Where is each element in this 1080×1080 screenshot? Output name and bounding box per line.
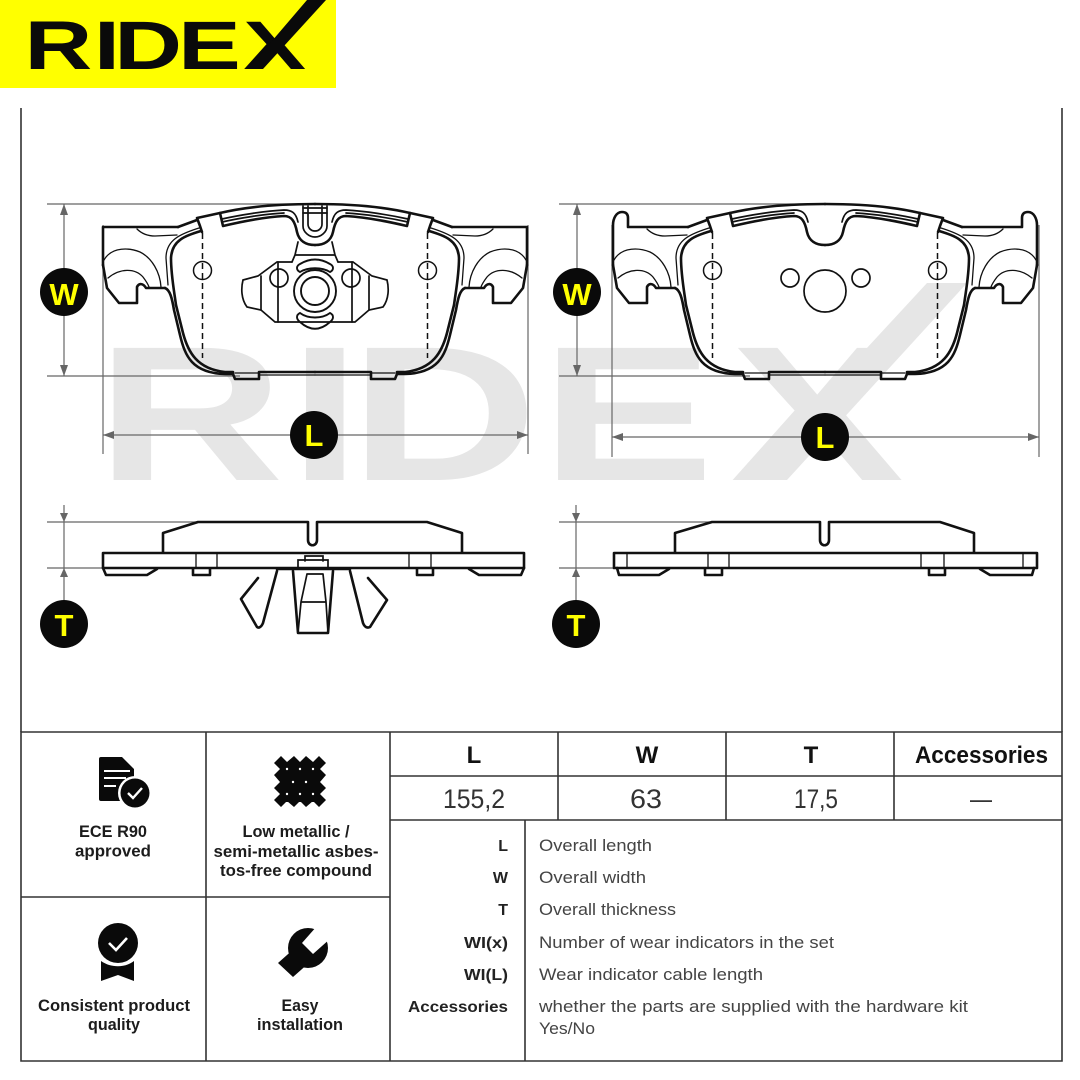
icon: quality badge bbox=[98, 923, 138, 981]
table values: 155,2 bbox=[443, 784, 505, 814]
legend keys: L bbox=[498, 838, 508, 855]
label: installation bbox=[257, 1016, 343, 1034]
top centre clip bbox=[292, 206, 338, 262]
table header: L bbox=[467, 742, 481, 769]
feature grid and table rules bbox=[21, 732, 1062, 1061]
legend keys: W bbox=[493, 870, 509, 887]
watermark: RIDEX letters: RIDEX bbox=[96, 307, 904, 521]
label: ECE R90 bbox=[79, 823, 147, 841]
panel: easy installation bbox=[257, 926, 343, 1034]
brake pad side view: right bbox=[614, 522, 1037, 575]
T badge: left: T bbox=[55, 608, 74, 643]
legend descriptions bbox=[538, 837, 968, 1038]
dimension lines: right front view bbox=[559, 204, 1039, 457]
dimension lines: left side view bbox=[47, 505, 200, 600]
icon: mesh compound bbox=[274, 756, 326, 807]
label: Low metallic / bbox=[242, 823, 350, 841]
L badge: right: L bbox=[816, 420, 834, 455]
T badge: right bbox=[552, 600, 600, 648]
legend descriptions: Overall length bbox=[539, 837, 652, 855]
table header: W bbox=[636, 742, 659, 769]
icon: wrench bbox=[278, 926, 331, 977]
legend descriptions: Overall width bbox=[539, 869, 646, 887]
label: semi-metallic asbes- bbox=[214, 843, 378, 861]
centre spring plate bbox=[242, 260, 388, 329]
label: Consistent product bbox=[38, 997, 191, 1015]
label: quality bbox=[88, 1016, 141, 1034]
table values: — bbox=[970, 784, 992, 814]
label: tos-free compound bbox=[220, 862, 372, 880]
panel: ECE R90 approved bbox=[75, 757, 152, 860]
legend keys: Accessories bbox=[408, 999, 508, 1016]
table values: 17,5 bbox=[794, 784, 838, 814]
label: approved bbox=[75, 842, 151, 860]
L badge: right bbox=[801, 413, 849, 461]
table header bbox=[467, 742, 1048, 769]
brake pad front view: right bbox=[613, 204, 1037, 379]
panel: consistent product quality bbox=[38, 923, 191, 1034]
W badge: left bbox=[40, 268, 88, 316]
W badge: right bbox=[553, 268, 601, 316]
icon: certified document bbox=[99, 757, 152, 810]
dimension lines: right side view bbox=[559, 505, 712, 600]
brake pad front view: left bbox=[103, 204, 527, 379]
table values bbox=[443, 784, 992, 814]
table header: Accessories bbox=[915, 742, 1048, 769]
panel: low metallic compound bbox=[214, 756, 378, 880]
legend descriptions: Wear indicator cable length bbox=[539, 966, 763, 984]
legend keys: T bbox=[498, 902, 508, 919]
legend keys: WI(L) bbox=[464, 967, 508, 984]
holes bbox=[781, 269, 870, 312]
legend descriptions: Number of wear indicators in the set bbox=[539, 934, 834, 952]
legend descriptions: whether the parts are supplied with the hardware kit bbox=[538, 998, 968, 1016]
drawing frame side rules bbox=[21, 108, 1062, 732]
L badge: left: L bbox=[305, 418, 323, 453]
brake pad side view: left bbox=[103, 522, 524, 633]
T badge: right: T bbox=[567, 608, 586, 643]
left plate ear bbox=[103, 227, 178, 303]
W badge: left: W bbox=[49, 277, 79, 312]
legend descriptions: Overall thickness bbox=[539, 901, 676, 919]
legend keys bbox=[408, 838, 509, 1016]
label: Easy bbox=[282, 997, 319, 1015]
legend descriptions: Yes/No bbox=[539, 1020, 595, 1038]
dimension lines: left front view bbox=[47, 204, 528, 454]
legend keys: WI(x) bbox=[464, 935, 508, 952]
W badge: right: W bbox=[562, 277, 592, 312]
logo: RIDEX yellow badge: RIDEX bbox=[24, 7, 306, 84]
T badge: left bbox=[40, 600, 88, 648]
clip bbox=[241, 556, 387, 633]
right plate ear bbox=[452, 227, 527, 303]
table values: 63 bbox=[630, 784, 662, 814]
L badge: left bbox=[290, 411, 338, 459]
table header: T bbox=[804, 742, 819, 769]
